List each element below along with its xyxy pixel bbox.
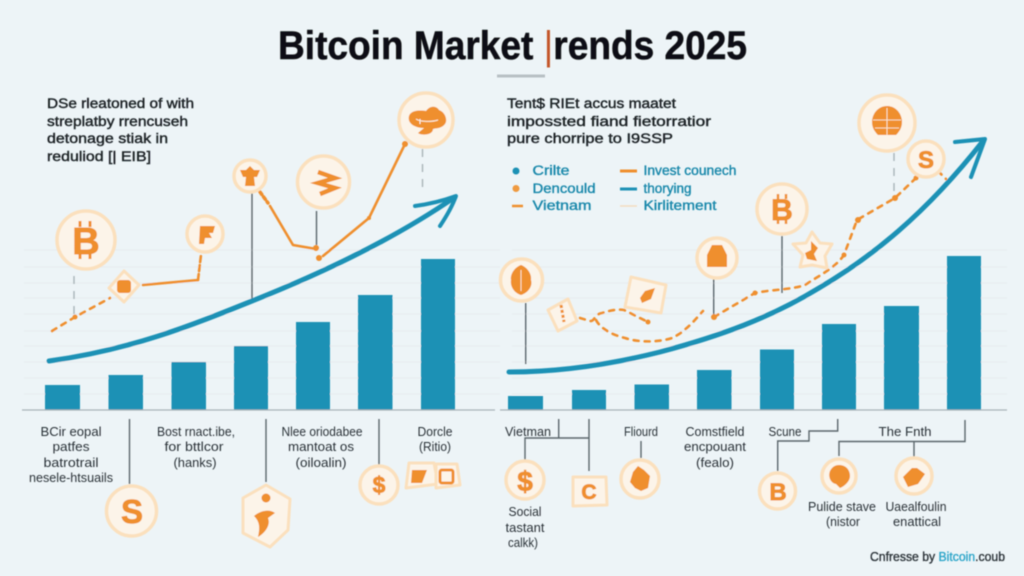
icon: bag coin: [697, 238, 737, 278]
arrow: left growth trend: [49, 196, 456, 361]
labels: left axis: nesele-htsuails: [29, 471, 113, 485]
legend: Invest counech: [644, 163, 736, 178]
line chart: right orange trend: [580, 171, 946, 341]
labels: left axis: [29, 425, 453, 485]
connector lines: left labels: [130, 419, 379, 484]
icon: brain coin: [822, 459, 856, 493]
text block: left intro: [47, 96, 194, 164]
icon: small coin flag: [187, 216, 223, 252]
labels: right axis: Pulide stave: [808, 500, 876, 514]
title: Bitcoin Market |rends 2025: [278, 24, 747, 68]
icon: leaf note tile: [625, 277, 666, 313]
labels: right axis: (fealo): [696, 456, 734, 470]
text block: left intro: streplatby rrencuseh: [47, 114, 188, 129]
labels: left axis: (hanks): [174, 456, 216, 470]
labels: right axis: [505, 425, 947, 550]
labels: left axis: batrotrail: [44, 456, 98, 470]
labels: right axis: Social: [508, 505, 542, 519]
labels: right axis: (nistor: [826, 515, 860, 529]
arrow: right growth trend: [509, 139, 985, 372]
icon: money coin: [500, 259, 542, 301]
icon: C tile: [573, 477, 607, 506]
labels: right axis: Fliourd: [624, 425, 658, 439]
bar chart: left bars: [22, 259, 495, 410]
labels: left axis: BCir eopal: [40, 425, 102, 439]
labels: right axis: calkk): [508, 536, 538, 550]
labels: right axis: Vietman: [505, 425, 551, 439]
icon: globe coin: [859, 95, 915, 151]
icon: bitcoin right: [757, 184, 807, 234]
labels: right axis: Scune: [768, 425, 802, 439]
icon: paired tiles: [406, 463, 460, 488]
icon: bitcoin: [57, 211, 115, 269]
icon: diamond coin: [109, 271, 139, 302]
icon: C tile: C: [581, 481, 597, 504]
icon: G coin: S: [918, 147, 934, 174]
icon: G coin: [908, 141, 944, 177]
text block: left intro: DSe rleatoned of with: [47, 96, 194, 111]
text block: left intro: reduliod [| EIB]: [47, 149, 151, 164]
labels: left axis: mantoat os: [288, 440, 354, 454]
legend: Kirlitement: [644, 198, 717, 213]
text block: right intro: impossted fiand fietorratior: [507, 114, 712, 129]
labels: left axis: (Ritio): [419, 440, 451, 454]
labels: left axis: (oiloalin): [296, 456, 346, 470]
legend: thorying: [644, 181, 692, 196]
labels: left axis: Dorcle: [418, 425, 453, 439]
legend: [512, 163, 736, 213]
icon: lantern: [234, 160, 266, 192]
connector lines: right labels: [525, 419, 965, 471]
credit line: Cnfresse by Bitcoin.coub: [870, 549, 1005, 564]
line chart: left orange trend: [52, 141, 408, 331]
icon: cloud coin: [399, 93, 453, 147]
legend: Crilte: [532, 163, 570, 178]
text block: right intro: [507, 96, 712, 146]
icon: S coin: S: [121, 493, 143, 530]
labels: right axis: The Fnth: [878, 425, 932, 439]
icon: dollar coin: [360, 466, 398, 504]
connector lines: left chart: [74, 149, 422, 317]
legend: Dencould: [532, 181, 596, 196]
panel: left chart: [22, 93, 495, 547]
connector lines: right chart: [526, 153, 894, 364]
text block: right intro: pure chorripe to I9SSP: [507, 131, 673, 146]
labels: right axis: enattical: [893, 515, 941, 529]
labels: left axis: Nlee oriodabee: [282, 425, 363, 439]
icon: dollar coin right: $: [517, 466, 533, 497]
icon: bitcoin lower: B: [769, 479, 787, 506]
icon: bag coin lower: [621, 460, 659, 498]
labels: left axis: Bost rnact.ibe,: [157, 425, 235, 439]
icon: bitcoin lower: [760, 473, 796, 509]
text block: right intro: Tent$ RIEt accus maatet: [507, 96, 676, 111]
labels: right axis: Uaealfoulin: [886, 500, 947, 514]
icon: S coin: [106, 486, 156, 536]
bar chart: right bars: [500, 256, 1007, 410]
panel: right chart: [500, 95, 1007, 550]
legend: Vietnam: [532, 198, 592, 213]
icon: bitcoin right: B: [771, 194, 793, 227]
icon: small note tile: [548, 299, 577, 331]
icon: dollar coin: $: [373, 472, 386, 498]
text block: left intro: detonage stiak in: [47, 131, 168, 146]
labels: left axis: for bttlcor: [164, 440, 224, 454]
icon: star: [793, 232, 832, 268]
icon: W coin: [298, 156, 350, 208]
icon: shield: [243, 485, 290, 547]
icon: hand coin: [896, 458, 932, 494]
labels: right axis: encpouant: [684, 440, 747, 454]
icon: bitcoin: B: [72, 221, 100, 263]
icon: dollar coin right: [506, 461, 544, 499]
labels: left axis: patfes: [52, 440, 90, 454]
labels: right axis: Comstfield: [686, 425, 745, 439]
labels: right axis: tastant: [506, 521, 545, 535]
